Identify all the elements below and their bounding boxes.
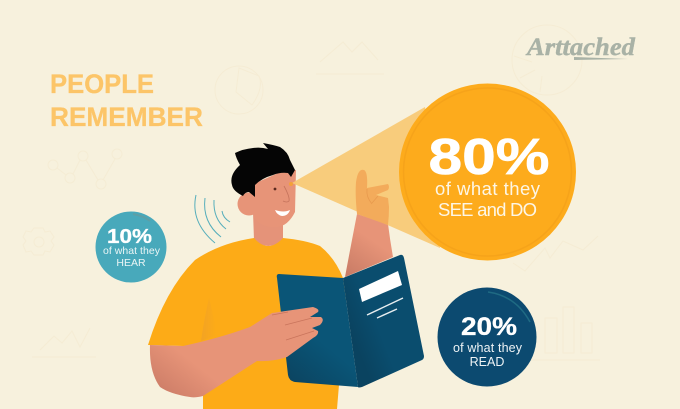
orange circle: see and do: SEE and DO [438,199,537,220]
teal circle: hear: of what they [103,245,161,257]
shirt fold [201,298,216,341]
raised forearm [345,214,393,277]
icon: line chart top [316,42,384,74]
icon: dot line chart [48,149,122,189]
finger lines [272,312,314,340]
ear [238,192,260,216]
teal circle: hear [96,212,166,282]
book left cover [277,274,358,387]
neck [253,212,283,246]
smile [275,210,290,216]
holding arm [150,307,323,397]
title [50,69,203,132]
person [148,143,424,409]
orange circle: see and do: 80% [428,128,550,185]
sound waves [195,195,230,243]
eye glint [289,182,293,186]
icon: bar chart [530,307,600,360]
orange circle: see and do: of what they [435,178,541,199]
hand finger lines [367,189,378,204]
navy circle: read: 20% [461,313,517,341]
icon: gauge behind logo [512,25,582,95]
logo: Arttached [525,34,636,61]
eye [274,188,276,190]
t-shirt [148,238,346,409]
background decorative icons [23,25,600,360]
teal circle: hear: 10% [107,226,152,248]
title line 2: REMEMBER [50,102,203,132]
vision beam [292,107,440,248]
face [254,170,296,227]
book label [359,271,402,302]
navy circle: read: of what they [453,341,523,355]
raised hand seen through beam [356,170,389,225]
book text lines [367,298,403,318]
orange circle: see and do [399,84,576,260]
icon: gear [23,228,54,255]
teal circle: hear: HEAR [116,257,146,269]
icon: rising line chart [513,236,598,271]
hair [231,143,295,197]
open book [277,255,424,388]
title line 1: PEOPLE [50,69,154,99]
book right cover [343,255,424,388]
navy circle: read: READ [470,355,504,369]
navy circle: read [438,288,536,386]
icon: pie chart [215,66,263,114]
nose [283,186,289,202]
icon: small line chart [32,328,96,357]
